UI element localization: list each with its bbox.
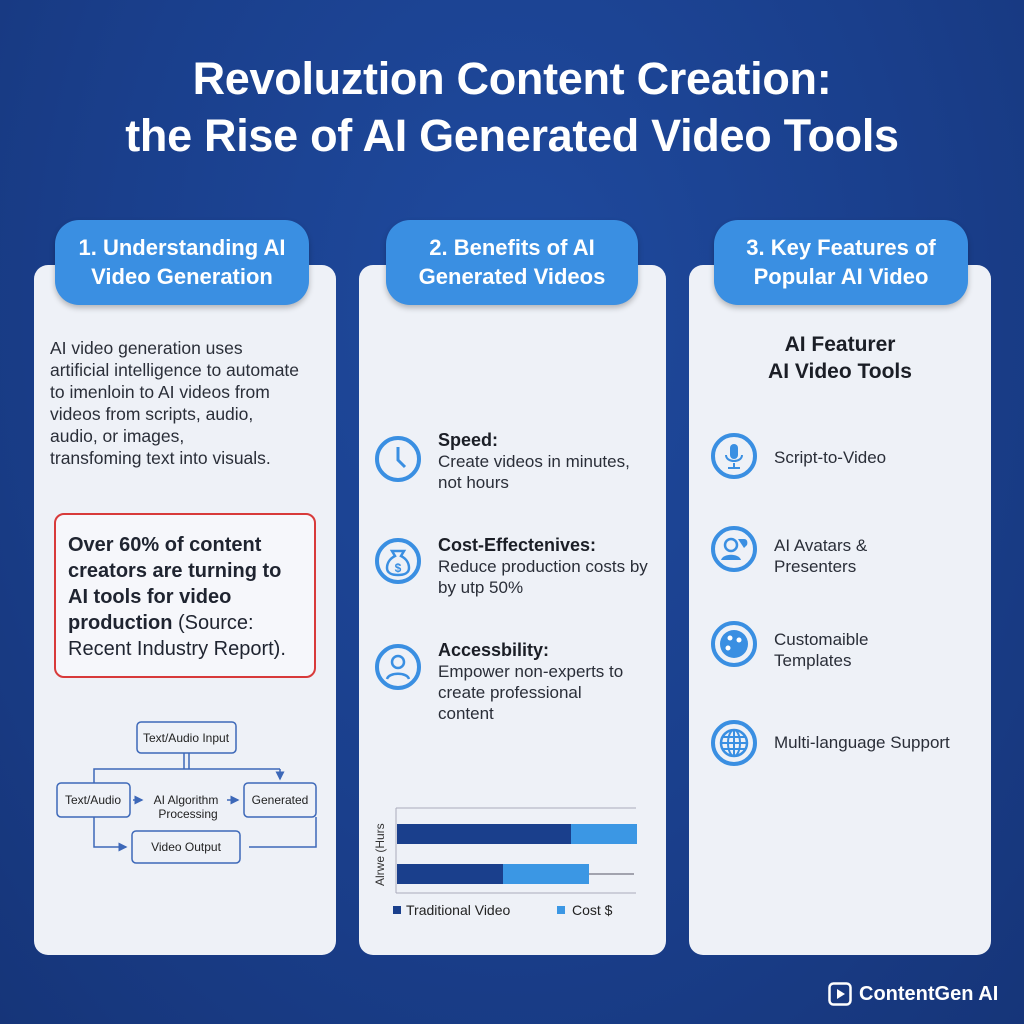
text: accessibility: create professional	[438, 683, 582, 702]
icon: avatar	[711, 526, 757, 572]
title	[125, 53, 899, 161]
bar chart: Cost $	[572, 902, 613, 918]
intro text: videos from scripts, audio,	[50, 404, 253, 424]
bar chart: Traditional Video	[406, 902, 511, 918]
panel: understanding	[34, 265, 336, 955]
callout: statistic: Over 60% of content creators are turning to AI tools for video production (Source: Recent Industry Report).	[68, 534, 286, 660]
text: speed: not hours	[438, 473, 509, 492]
tab: understanding	[55, 220, 309, 305]
icon: globe	[711, 720, 757, 766]
panel: benefits	[359, 265, 666, 955]
intro text	[50, 338, 299, 468]
icon: microphone	[711, 433, 757, 479]
icon: person	[375, 644, 421, 690]
text: accessibility: content	[438, 704, 494, 723]
text: cost	[438, 535, 648, 597]
text: accessibility: Accessbility:	[438, 640, 549, 660]
icon: clock	[375, 436, 421, 482]
text: Customaible	[774, 630, 868, 649]
bar chart: Alrwe (Hurs	[373, 823, 387, 886]
icon: palette	[711, 621, 757, 667]
flowchart: Processing	[158, 807, 218, 821]
text: speed	[438, 430, 630, 492]
callout: statistic	[54, 513, 316, 678]
subheading: AI Video Tools	[768, 360, 912, 383]
text: Multi-language Support	[774, 733, 950, 752]
text: Script-to-Video	[774, 448, 886, 467]
flowchart: Generated	[252, 793, 308, 807]
text: Presenters	[774, 557, 856, 576]
text: AI Avatars &	[774, 536, 867, 555]
tab: understanding: 1. Understanding AI	[78, 235, 285, 260]
tab: features	[714, 220, 968, 305]
panel: features	[689, 265, 991, 955]
tab: benefits: Generated Videos	[419, 264, 605, 289]
bar chart	[373, 808, 637, 918]
tab: features: Popular AI Video	[754, 264, 928, 289]
text: Templates	[774, 651, 851, 670]
text: accessibility	[438, 640, 623, 723]
text: cost: Reduce production costs by	[438, 557, 648, 576]
title: the Rise of AI Generated Video Tools	[125, 110, 899, 161]
flowchart: Video Output	[151, 840, 222, 854]
flowchart: Text/Audio	[65, 793, 121, 807]
icon: money bag	[375, 538, 421, 584]
logo: ContentGen AI	[859, 983, 998, 1005]
text: accessibility: Empower non-experts to	[438, 662, 623, 681]
tab: understanding: Video Generation	[91, 264, 273, 289]
intro text: transfoming text into visuals.	[50, 448, 271, 468]
tab: benefits	[386, 220, 638, 305]
flowchart: AI Algorithm	[154, 793, 218, 807]
tab: benefits: 2. Benefits of AI	[429, 235, 595, 260]
text	[774, 630, 868, 670]
intro text: audio, or images,	[50, 426, 184, 446]
icon: money bag: $	[395, 561, 402, 575]
tab: features: 3. Key Features of	[746, 235, 936, 260]
text	[774, 536, 867, 576]
flowchart: Text/Audio Input	[143, 731, 230, 745]
subheading	[768, 333, 912, 383]
text: cost: Cost-Effectenives:	[438, 535, 596, 555]
text: speed: Create videos in minutes,	[438, 452, 630, 471]
title: Revoluztion Content Creation:	[193, 53, 831, 104]
intro text: artificial intelligence to automate	[50, 360, 299, 380]
flowchart	[56, 721, 317, 864]
icon: play	[828, 982, 852, 1006]
intro text: to imenloin to AI videos from	[50, 382, 270, 402]
text: speed: Speed:	[438, 430, 498, 450]
subheading: AI Featurer	[785, 333, 895, 356]
text: cost: by utp 50%	[438, 578, 523, 597]
intro text: AI video generation uses	[50, 338, 243, 358]
